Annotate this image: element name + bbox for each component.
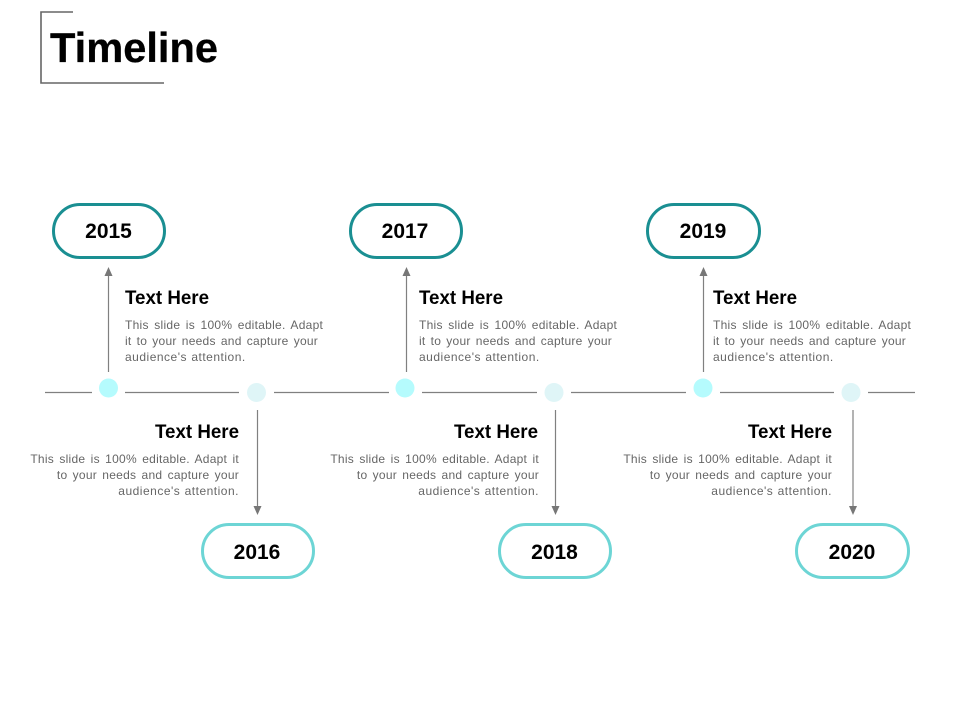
milestone 2015 [54, 204, 324, 398]
milestone 2017 [350, 204, 618, 398]
year pill 2019: 2019 [680, 220, 726, 243]
year pill 2016 [202, 524, 314, 578]
text block 2016 [30, 422, 239, 498]
text block 2018: audience's attention. [418, 484, 539, 498]
year pill 2019 [648, 204, 760, 258]
marker 2016 [247, 383, 266, 402]
text block 2018 [330, 422, 539, 498]
text block 2017 [419, 288, 618, 364]
marker 2017 [396, 378, 414, 398]
year pill 2017: 2017 [382, 220, 428, 243]
year pill 2018 [500, 524, 610, 578]
text block 2018: Text Here [454, 422, 538, 443]
year pill 2020 [796, 524, 908, 578]
text block 2015: audience's attention. [125, 350, 246, 364]
title: Timeline [50, 24, 218, 71]
text block 2015: Text Here [125, 288, 209, 309]
title [41, 12, 218, 83]
text block 2016: Text Here [155, 422, 239, 443]
text block 2019: it to your needs and capture your [713, 334, 906, 348]
arrow down 2020 [849, 410, 857, 515]
text block 2017: audience's attention. [419, 350, 540, 364]
text block 2020: to your needs and capture your [650, 468, 832, 482]
year pill 2015: 2015 [85, 220, 132, 243]
text block 2017: This slide is 100% editable. Adapt [419, 318, 618, 332]
year pill 2020: 2020 [829, 541, 875, 564]
milestone 2016 [30, 383, 314, 578]
year pill 2015 [54, 204, 164, 258]
text block 2018: This slide is 100% editable. Adapt it [330, 452, 539, 466]
arrow up 2015 [104, 267, 112, 372]
text block 2020: This slide is 100% editable. Adapt it [623, 452, 832, 466]
text block 2020: Text Here [748, 422, 832, 443]
text block 2015: This slide is 100% editable. Adapt [125, 318, 324, 332]
text block 2018: to your needs and capture your [357, 468, 539, 482]
text block 2019: Text Here [713, 288, 797, 309]
text block 2015 [125, 288, 324, 364]
arrow down 2016 [254, 410, 262, 515]
milestone 2019 [648, 204, 912, 398]
text block 2016: This slide is 100% editable. Adapt it [30, 452, 239, 466]
text block 2017: Text Here [419, 288, 503, 309]
year pill 2016: 2016 [234, 541, 280, 564]
text block 2020: audience's attention. [711, 484, 832, 498]
arrow down 2018 [552, 410, 560, 515]
text block 2019: This slide is 100% editable. Adapt [713, 318, 912, 332]
marker 2019 [694, 378, 712, 398]
arrow up 2019 [700, 267, 708, 372]
text block 2020 [623, 422, 832, 498]
arrow up 2017 [402, 267, 410, 372]
marker 2015 [99, 378, 118, 398]
timeline axis [45, 392, 915, 394]
marker 2020 [842, 383, 860, 402]
milestone 2018 [330, 383, 610, 578]
year pill 2017 [350, 204, 462, 258]
milestone 2020 [623, 383, 908, 578]
text block 2016: audience's attention. [118, 484, 239, 498]
text block 2017: it to your needs and capture your [419, 334, 612, 348]
text block 2019: audience's attention. [713, 350, 834, 364]
text block 2019 [713, 288, 912, 364]
marker 2018 [544, 383, 564, 402]
text block 2016: to your needs and capture your [57, 468, 239, 482]
text block 2015: it to your needs and capture your [125, 334, 318, 348]
year pill 2018: 2018 [531, 541, 578, 564]
